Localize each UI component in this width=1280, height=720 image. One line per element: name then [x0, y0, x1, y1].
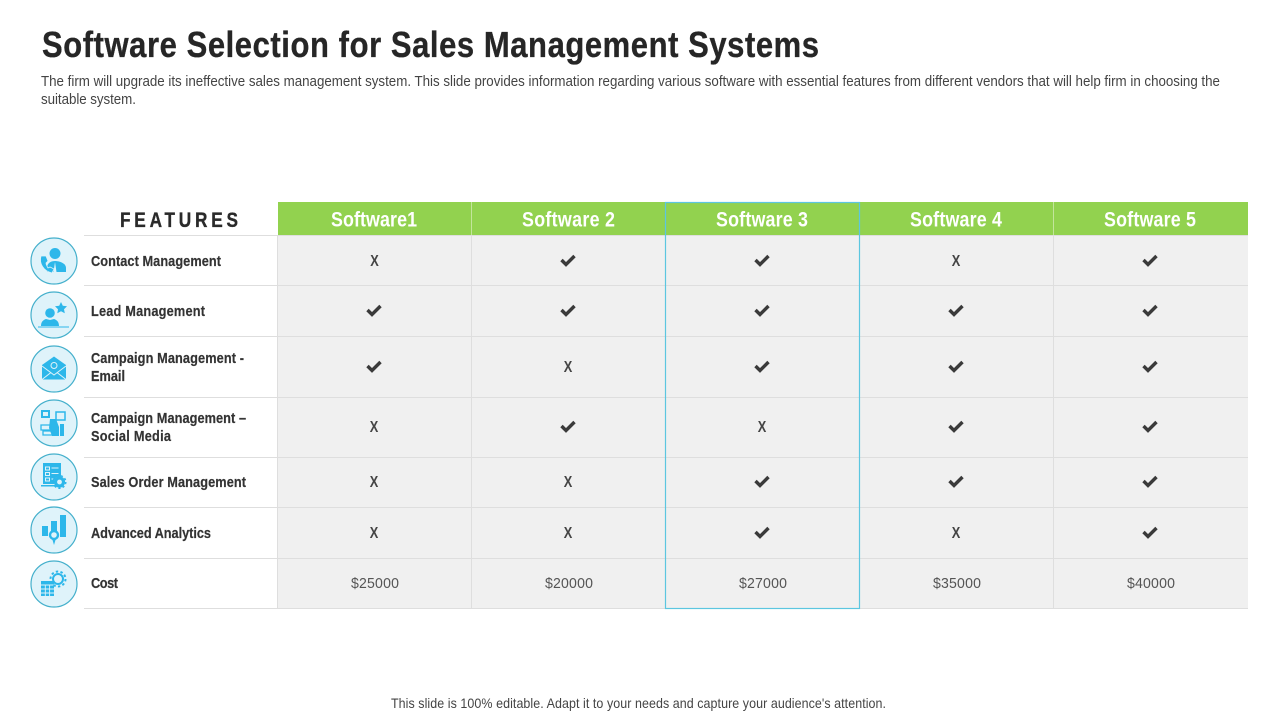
highlight box: software 3 column: [666, 202, 860, 608]
row: campaign management social media: [31, 400, 1156, 446]
software 2 value: [562, 306, 574, 314]
description text: suitable system.: [41, 91, 136, 108]
label: Social Media: [91, 427, 171, 444]
software 5 heading: Software 5: [1104, 208, 1196, 232]
label: Sales Order Management: [91, 473, 246, 490]
title: Software Selection for Sales Management Systems: [42, 26, 819, 66]
software 2 value: [562, 256, 574, 264]
software 1 value: X: [370, 419, 379, 436]
description text: [41, 73, 1220, 108]
icon: calculator with gear: [31, 561, 77, 607]
software 2 value: X: [564, 359, 573, 376]
label: Cost: [91, 574, 118, 591]
icon: order list with gear: [31, 454, 77, 500]
software 3 value: [756, 528, 768, 536]
software 3 heading: Software 3: [716, 208, 808, 232]
label: [91, 349, 244, 384]
row: cost: [31, 561, 1175, 607]
icon: bars with magnifier: [31, 507, 77, 553]
row: advanced analytics: [31, 507, 1156, 553]
software 2 value: X: [564, 525, 573, 542]
software 4 value: X: [952, 525, 961, 542]
software 5 value: [1144, 306, 1156, 314]
header bar: [120, 202, 1248, 235]
label: Advanced Analytics: [91, 524, 211, 541]
row: lead management: [31, 292, 1156, 338]
label: Contact Management: [91, 252, 221, 269]
label: Campaign Management –: [91, 409, 246, 426]
software 4 heading: Software 4: [910, 208, 1002, 232]
software 4 value: X: [952, 253, 961, 270]
software 1 heading: Software1: [331, 208, 417, 232]
software 4 value: [950, 477, 962, 486]
software 2 value: X: [564, 474, 573, 491]
software 5 value: [1144, 362, 1156, 370]
software 3 value: [756, 477, 768, 486]
software 1 value: [368, 306, 380, 314]
software 5 value: [1144, 528, 1156, 536]
icon: open envelope: [31, 346, 77, 392]
software 3 value: X: [758, 419, 767, 436]
software 4 value: [950, 422, 962, 430]
software 1 value: X: [370, 474, 379, 491]
row: contact management: [31, 238, 1156, 284]
software 1 value: X: [370, 525, 379, 542]
label: Lead Management: [91, 302, 205, 319]
comparison table: [31, 202, 1248, 608]
features heading: FEATURES: [120, 210, 238, 232]
software 4 cost: $35000: [933, 576, 981, 592]
software 1 value: X: [370, 253, 379, 270]
software 3 value: [756, 256, 768, 264]
software 1 value: [368, 362, 380, 370]
footer note: This slide is 100% editable. Adapt it to your needs and capture your audience's attention.: [391, 695, 886, 711]
software 2 heading: Software 2: [522, 208, 615, 232]
description text: The firm will upgrade its ineffective sales management system. This slide provides information regarding various software with essential features from different vendors that will help firm in choosing the: [41, 73, 1220, 90]
software 5 value: [1144, 477, 1156, 486]
table body background: [278, 235, 1248, 608]
software 5 cost: $40000: [1127, 576, 1175, 592]
software 1 cost: $25000: [351, 576, 399, 592]
software 5 value: [1144, 422, 1156, 430]
software 2 cost: $20000: [545, 576, 593, 592]
software 3 cost: $27000: [739, 576, 787, 592]
label: [91, 409, 246, 444]
icon: person with star: [31, 292, 77, 338]
icon: contact person with phone: [31, 238, 77, 284]
software 4 value: [950, 306, 962, 314]
software 2 value: [562, 422, 574, 430]
label: Campaign Management -: [91, 349, 244, 366]
row: sales order management: [31, 454, 1156, 500]
software 5 value: [1144, 256, 1156, 264]
software 4 value: [950, 362, 962, 370]
software 3 value: [756, 362, 768, 370]
software 3 value: [756, 306, 768, 314]
icon: social media person: [31, 400, 77, 446]
label: Email: [91, 367, 125, 384]
row: campaign management email: [31, 346, 1156, 392]
